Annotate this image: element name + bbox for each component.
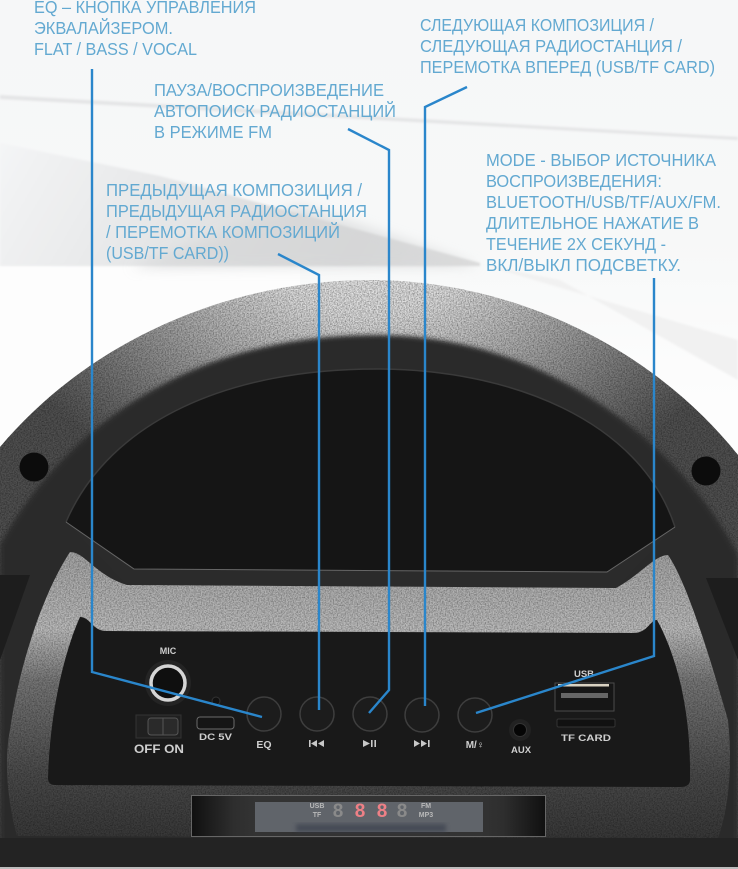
EQ label: EQ	[256, 739, 272, 751]
inner dark ring	[0, 335, 738, 869]
callout: previous: ПРЕДЫДУЩАЯ РАДИОСТАНЦИЯ	[106, 201, 367, 221]
line next	[425, 87, 467, 706]
display digits: 8	[397, 801, 407, 822]
callout: next: СЛЕДУЮЩАЯ РАДИОСТАНЦИЯ /	[420, 36, 682, 56]
button EQ	[247, 697, 281, 731]
callout: previous: (USB/TF CARD))	[106, 243, 229, 263]
display	[192, 796, 546, 836]
display digits	[333, 801, 407, 822]
callout: next	[420, 15, 715, 77]
textured grey frame	[7, 552, 730, 838]
callout: mode: ТЕЧЕНИЕ 2Х СЕКУНД -	[486, 234, 666, 254]
callout lines	[92, 69, 654, 717]
callout: mode: MODE - ВЫБОР ИСТОЧНИКА	[486, 150, 716, 170]
line previous	[278, 254, 319, 710]
speaker hollow	[66, 369, 675, 572]
callout: next: ПЕРЕМОТКА ВПЕРЕД (USB/TF CARD)	[420, 57, 715, 77]
aux label: AUX	[511, 745, 532, 756]
power switch	[136, 715, 181, 738]
tf slot	[557, 719, 615, 727]
callout: mode: BLUETOOTH/USB/TF/AUX/FM.	[486, 192, 721, 212]
bottom black band	[0, 838, 738, 867]
callout: play: В РЕЖИМЕ FM	[154, 122, 272, 142]
display labels: USB	[310, 803, 324, 810]
display labels	[310, 803, 433, 819]
callout: EQ	[34, 0, 256, 59]
off on label: OFF ON	[134, 744, 184, 756]
display labels: FM	[421, 803, 431, 810]
display labels: TF	[313, 812, 322, 819]
line mode	[476, 278, 654, 713]
dc port	[197, 697, 234, 729]
callout: previous	[106, 180, 367, 263]
mounting hole right	[692, 456, 720, 486]
callout: play: ПАУЗА/ВОСПРОИЗВЕДЕНИЕ	[154, 80, 384, 100]
play icon	[363, 740, 376, 747]
speaker body	[0, 280, 738, 869]
mounting hole left	[20, 452, 48, 482]
next icon	[414, 740, 430, 747]
callout: EQ: ЭКВАЛАЙЗЕРОМ.	[34, 17, 173, 38]
callout: EQ: FLAT / BASS / VOCAL	[34, 39, 197, 59]
callout: mode: ВОСПРОИЗВЕДЕНИЯ:	[486, 171, 662, 191]
panel background	[48, 617, 690, 787]
callout: mode: ДЛИТЕЛЬНОЕ НАЖАТИЕ В	[486, 213, 699, 233]
line play	[348, 129, 389, 713]
callout: previous: ПРЕДЫДУЩАЯ КОМПОЗИЦИЯ /	[106, 180, 362, 200]
display digits: 8	[355, 801, 365, 822]
callout: play: АВТОПОИСК РАДИОСТАНЦИЙ	[154, 100, 396, 121]
display digits: 8	[333, 801, 343, 822]
previous icon	[309, 740, 324, 747]
ledge under hollow	[66, 522, 675, 588]
mode label: M/♀	[466, 740, 484, 751]
display labels: MP3	[419, 812, 433, 819]
mic jack ring	[145, 660, 191, 706]
dome textured outer rim	[0, 280, 738, 869]
line EQ	[92, 69, 262, 717]
button next	[405, 698, 439, 732]
callout: mode	[486, 150, 721, 275]
tf card label: TF CARD	[561, 733, 611, 744]
button previous	[300, 697, 334, 731]
dc label: DC 5V	[199, 732, 233, 743]
display window	[192, 796, 546, 836]
display digits: 8	[377, 801, 387, 822]
aux jack	[509, 719, 531, 741]
usb label: USB	[574, 669, 594, 680]
callout: next: СЛЕДУЮЩАЯ КОМПОЗИЦИЯ /	[420, 15, 654, 35]
callout: previous: / ПЕРЕМОТКА КОМПОЗИЦИЙ	[106, 221, 340, 242]
button mode	[458, 698, 492, 732]
usb port	[555, 683, 614, 711]
control panel	[48, 617, 690, 787]
side black boxes	[0, 575, 30, 660]
callout: play	[154, 80, 396, 142]
button play	[353, 697, 387, 731]
callout: mode: ВКЛ/ВЫКЛ ПОДСВЕТКУ.	[486, 255, 681, 275]
mic label: MIC	[160, 646, 177, 656]
